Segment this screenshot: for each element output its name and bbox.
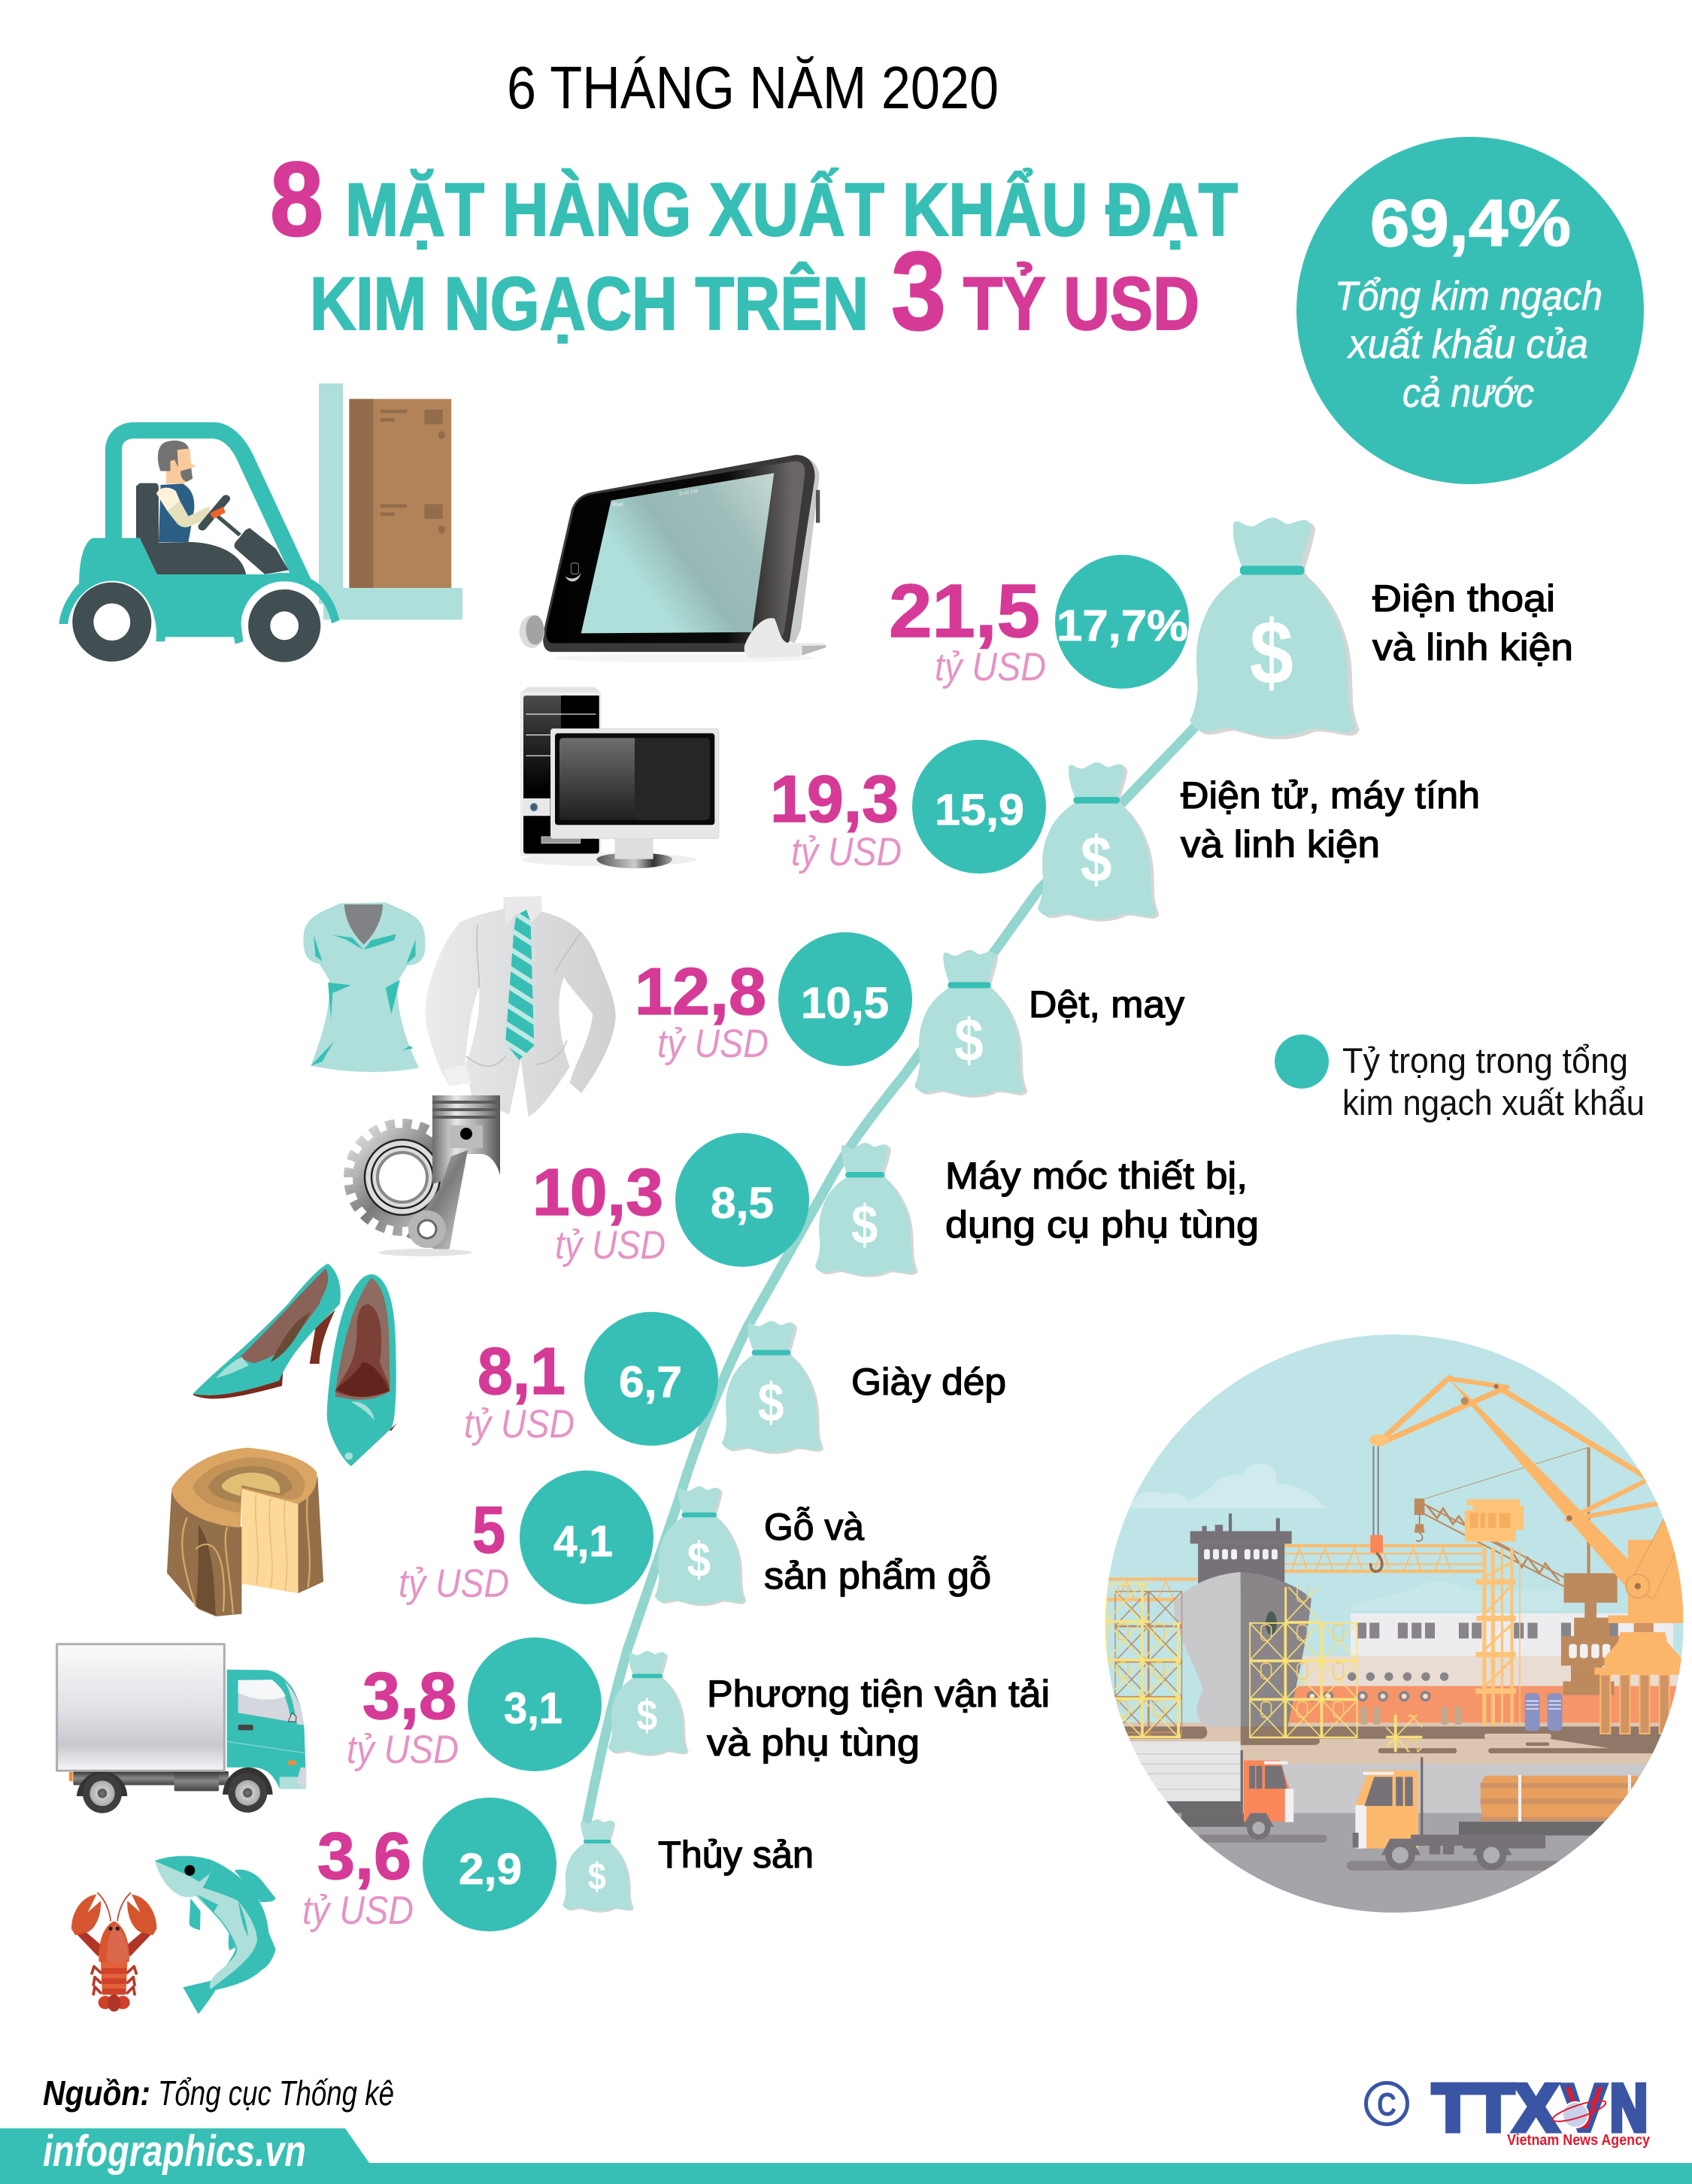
row 1: Điện thoại và linh kiện [889,517,1573,739]
row 6: Gỗ và sản phẩm gỗ: tỷ USD [399,1562,509,1606]
title: MẶT HÀNG XUẤT KHẨU ĐẠT [345,168,1238,251]
row 3: Dệt, may: tỷ USD [657,1022,769,1066]
row 4: Máy móc thiết bị, dụng cụ phụ tùng: tỷ USD [555,1223,666,1268]
callout: 69,4%: cả nước [1402,371,1534,416]
logo: TTXVN: C [1377,2086,1396,2123]
row 7: Phương tiện vận tải và phụ tùng: $ [636,1692,657,1740]
row 4: Máy móc thiết bị, dụng cụ phụ tùng: $ [851,1195,878,1256]
row 1: Điện thoại và linh kiện: và linh kiện [1372,626,1573,668]
row 8: Thủy sản: $ [588,1855,606,1898]
row 7: Phương tiện vận tải và phụ tùng: tỷ USD [347,1728,459,1772]
logo: TTXVN: N [1610,2070,1648,2145]
icon: desktop computer [520,687,719,868]
row 2: Điện tử, máy tính và linh kiện: 19,3 [770,762,899,836]
callout: 69,4%: 69,4% [1370,186,1571,260]
row 6: Gỗ và sản phẩm gỗ [399,1471,991,1606]
row 5: Giày dép: Giày dép [851,1361,1006,1403]
row 3: Dệt, may: $ [954,1007,984,1074]
callout: 69,4%: xuất khẩu của [1346,322,1588,367]
row 7: Phương tiện vận tải và phụ tùng: và phụ tùng [707,1722,920,1764]
row 5: Giày dép: 8,1 [478,1334,566,1408]
logo: TTXVN [1366,2070,1651,2149]
icon: clothes [303,896,616,1117]
row 2: Điện tử, máy tính và linh kiện: $ [1081,824,1112,896]
row 8: Thủy sản: tỷ USD [302,1889,414,1933]
row 5: Giày dép: 6,7 [619,1358,682,1407]
row 3: Dệt, may: 10,5 [801,979,889,1028]
row 6: Gỗ và sản phẩm gỗ: 4,1 [553,1517,613,1566]
footer bar: infographics.vn [43,2127,306,2176]
icon: tablet with earphones: iPod [612,502,623,507]
row 7: Phương tiện vận tải và phụ tùng: 3,8 [362,1658,456,1733]
row 3: Dệt, may [635,932,1184,1098]
row 5: Giày dép: $ [758,1372,784,1433]
row 7: Phương tiện vận tải và phụ tùng: 3,1 [504,1684,562,1733]
row 8: Thủy sản [302,1798,814,1933]
footer bar [0,2127,1692,2184]
row 4: Máy móc thiết bị, dụng cụ phụ tùng: dụng cụ phụ tùng [945,1204,1259,1246]
icon: lobster [71,1893,156,2012]
subtitle: 6 THÁNG NĂM 2020 [507,54,999,121]
row 7: Phương tiện vận tải và phụ tùng [347,1637,1050,1772]
legend: Tỷ trọng trong tổng [1342,1041,1628,1080]
row 6: Gỗ và sản phẩm gỗ: $ [687,1532,711,1587]
title: TỶ USD [963,262,1199,345]
row 2: Điện tử, máy tính và linh kiện: Điện tử, máy tính [1181,774,1480,816]
row 2: Điện tử, máy tính và linh kiện: và linh kiện [1181,823,1380,865]
row 6: Gỗ và sản phẩm gỗ: Gỗ và [764,1506,864,1548]
illustration: port scene [1099,1331,1689,1921]
icon: fish [155,1856,276,2014]
row 3: Dệt, may: 12,8 [635,954,766,1028]
logo: TTXVN: TTX [1433,2070,1558,2145]
logo: TTXVN: V [1562,2070,1606,2145]
title: KIM NGẠCH TRÊN [310,262,869,345]
icon: tablet with earphones [520,455,826,662]
icon: shoes [193,1264,397,1466]
callout: 69,4% [1296,137,1644,484]
row 2: Điện tử, máy tính và linh kiện: 15,9 [935,786,1024,835]
row 5: Giày dép [464,1312,1006,1454]
icon: tablet with earphones: 9:42 AM [679,489,699,497]
legend [1275,1034,1645,1122]
row 2: Điện tử, máy tính và linh kiện: tỷ USD [791,830,902,874]
row 3: Dệt, may: Dệt, may [1029,983,1184,1025]
row 4: Máy móc thiết bị, dụng cụ phụ tùng: Máy móc thiết bị, [945,1155,1248,1197]
title: 3 [891,229,946,353]
row 7: Phương tiện vận tải và phụ tùng: Phương tiện vận tải [707,1673,1050,1715]
callout: 69,4%: Tổng kim ngạch [1335,274,1603,319]
row 8: Thủy sản: Thủy sản [658,1834,814,1876]
row 4: Máy móc thiết bị, dụng cụ phụ tùng [532,1133,1259,1277]
row 6: Gỗ và sản phẩm gỗ: sản phẩm gỗ [764,1555,991,1597]
source: Tổng cục Thống kê [158,2073,394,2113]
icon: forklift [59,383,462,662]
row 8: Thủy sản: 3,6 [317,1819,411,1893]
title: 8 [270,140,323,258]
row 8: Thủy sản: 2,9 [459,1845,522,1894]
icon: wood stump [167,1448,323,1616]
row 1: Điện thoại và linh kiện: 21,5 [889,569,1040,653]
row 1: Điện thoại và linh kiện: tỷ USD [935,645,1046,689]
row 4: Máy móc thiết bị, dụng cụ phụ tùng: 8,5 [711,1179,774,1228]
source: Nguồn: [43,2073,150,2113]
source [43,2073,394,2113]
row 1: Điện thoại và linh kiện: 17,7% [1057,601,1188,650]
row 1: Điện thoại và linh kiện: Điện thoại [1372,577,1555,619]
title [270,140,1238,353]
legend: kim ngạch xuất khẩu [1342,1083,1645,1122]
value line [587,726,1196,1823]
icon: truck [57,1644,306,1813]
logo: TTXVN: Vietnam News Agency [1507,2132,1651,2149]
icon: gear and piston [350,1095,500,1256]
row 2: Điện tử, máy tính và linh kiện [770,740,1480,921]
row 5: Giày dép: tỷ USD [464,1402,575,1446]
row 1: Điện thoại và linh kiện: $ [1250,602,1293,704]
row 4: Máy móc thiết bị, dụng cụ phụ tùng: 10,3 [532,1155,663,1229]
row 6: Gỗ và sản phẩm gỗ: 5 [472,1492,505,1567]
